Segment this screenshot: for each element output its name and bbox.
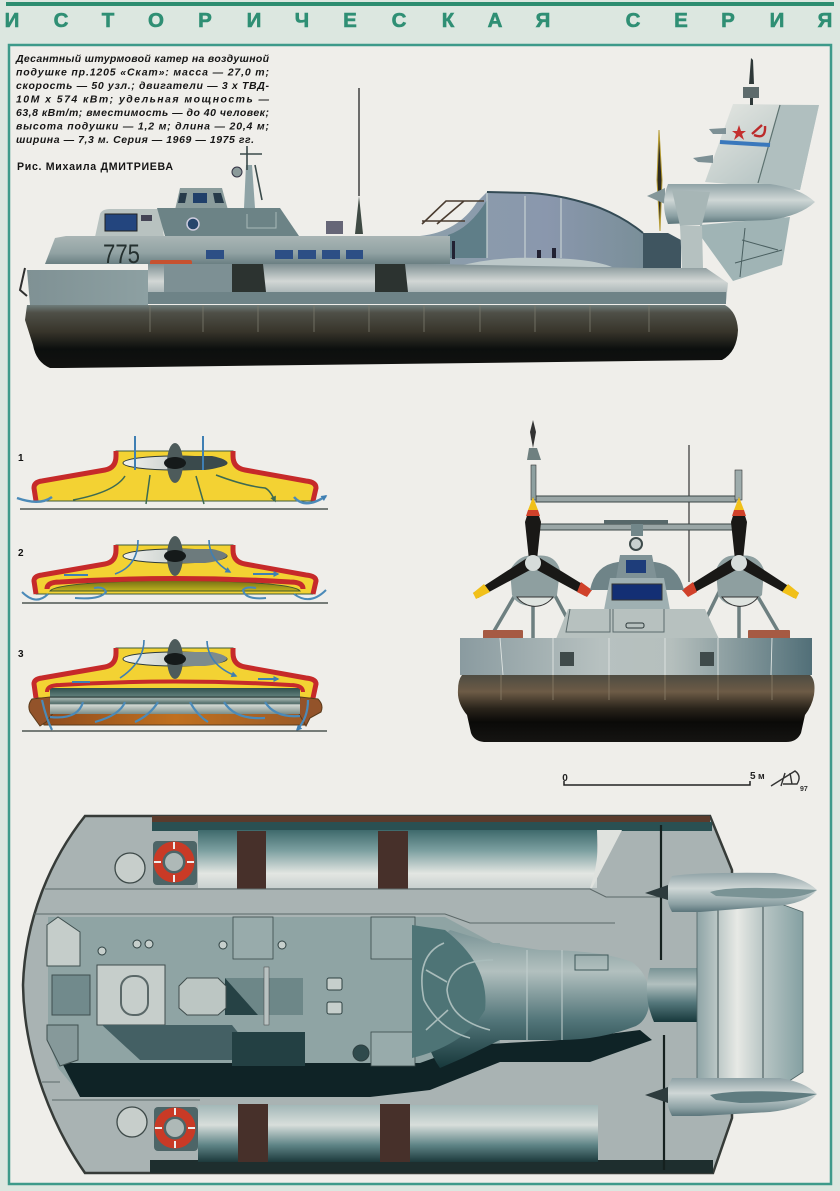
top hatch [115, 853, 145, 883]
top view of the hovercraft [23, 816, 817, 1173]
wheelhouse front [615, 555, 658, 585]
upper hull band [45, 236, 450, 264]
side view of the hovercraft [20, 58, 819, 368]
air intake duct with rail [402, 192, 643, 268]
spec text block: скорость — 50 узл.; двигатели — 3 х ТВД- [16, 80, 270, 92]
life raft [150, 260, 192, 267]
bridge superstructure [157, 208, 343, 236]
spec text block: Десантный штурмовой катер на воздушной [15, 53, 270, 65]
top side pocket [152, 816, 712, 889]
deck plan outline [23, 816, 732, 1173]
spec text block: ширина — 7,3 м. Серия — 1969 — 1975 гг. [16, 134, 254, 146]
bottom engine nacelle [645, 1078, 817, 1116]
airflow diagram 3 [18, 639, 327, 731]
airflow diagram 1 [17, 436, 328, 509]
left mast [527, 420, 541, 500]
scale bar: 0 [562, 773, 568, 784]
dome behind cabin [590, 562, 684, 590]
illustrator signature: 97 [800, 786, 808, 793]
bottom life ring [154, 1107, 198, 1151]
number 2: 2 [18, 548, 24, 559]
front view of the hovercraft [458, 420, 814, 742]
bow plate [27, 270, 148, 305]
side windows [206, 250, 363, 259]
number 3: 3 [18, 649, 24, 660]
radar mast [232, 146, 262, 208]
shadow band [62, 1030, 652, 1097]
illustrator credit: Рис. Михаила ДМИТРИЕВА [17, 161, 173, 173]
wheelhouse [175, 188, 228, 210]
mast-top figure on fin [743, 58, 759, 105]
tail fin [693, 104, 819, 190]
spec text block [15, 53, 270, 146]
forward cabin front [604, 578, 670, 610]
gangway lines [34, 889, 660, 1100]
bow cleat [20, 268, 27, 296]
rear air duct [412, 925, 650, 1068]
spec text block: подушке пр.1205 «Скат»: масса — 27,0 т; [16, 66, 269, 78]
spec text block: высота подушки — 1,2 м; длина — 20,4 м; [16, 120, 269, 132]
deck fittings [98, 940, 369, 1061]
airflow diagram 2 [18, 536, 328, 603]
bridge and diagonal shadow [102, 967, 305, 1066]
scale bar: 5 [750, 771, 756, 782]
left nacelle and propeller [473, 497, 592, 640]
superstructure front [556, 609, 719, 639]
top life ring [153, 841, 197, 885]
propeller [647, 130, 665, 231]
hull side lower band [148, 264, 728, 302]
bottom side pocket [150, 1104, 713, 1173]
forward cabin [95, 209, 164, 237]
spec text block: 63,8 кВт/т; вместимость — до 40 человек; [16, 107, 269, 119]
central deck [48, 917, 500, 1092]
antenna mast [355, 88, 363, 234]
tail plane [697, 900, 803, 1087]
life rafts [483, 630, 790, 639]
aft box [643, 233, 681, 268]
side tunnels [232, 264, 408, 292]
hull number: 775 [103, 239, 140, 269]
top engine nacelle [645, 873, 817, 912]
number 1: 1 [18, 453, 24, 464]
header title: historical series: ИСТОРИЧЕСКАЯСЕРИЯ [5, 9, 832, 32]
engine nacelle and pylon [664, 184, 815, 281]
propeller disc lines [661, 825, 664, 1170]
skirt front [458, 675, 814, 742]
scale bar [562, 771, 765, 785]
air cushion skirt [25, 305, 738, 368]
right nacelle and propeller [682, 497, 799, 640]
deck hatches [233, 917, 415, 1066]
scale bar: м [758, 771, 765, 781]
cabin roof [97, 965, 165, 1025]
antenna [688, 445, 690, 582]
right mast [735, 470, 742, 500]
bottom hatch [117, 1107, 147, 1137]
horizontal bars [536, 496, 736, 550]
duct neck [647, 968, 697, 1022]
illustrator signature [771, 771, 808, 793]
spec text block: 10М х 574 кВт; удельная мощность — [16, 94, 270, 106]
hull front [460, 638, 812, 675]
header bar [6, 2, 834, 6]
forward window panel [47, 917, 90, 1066]
